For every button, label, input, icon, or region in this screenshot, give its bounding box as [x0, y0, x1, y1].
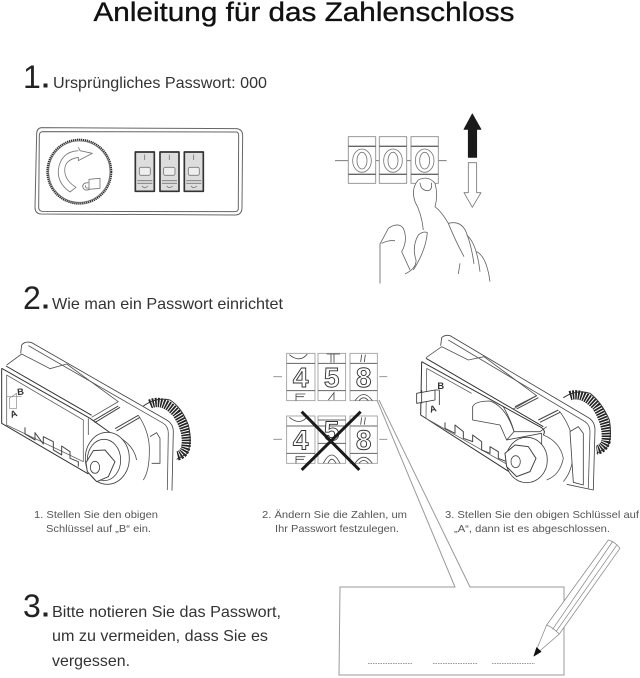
key slider at A — [417, 390, 439, 405]
crossed out 458 wheels: 8 — [356, 425, 371, 456]
wheels showing 000 — [348, 137, 438, 183]
housing top face — [7, 354, 118, 417]
illustration: finger turning wheels — [335, 114, 490, 283]
hand — [380, 178, 490, 283]
knurled knob — [143, 399, 190, 459]
key symbol — [83, 178, 100, 190]
step 3 text: vergessen. — [52, 653, 130, 670]
heading: step 1: Ursprüngliches Passwort: 000 — [53, 75, 267, 92]
correct 458 wheels: 8 — [356, 362, 371, 393]
caption 1: Schlüssel auf „B“ ein. — [46, 523, 151, 535]
crossed out 458 wheels — [273, 412, 387, 470]
icon: pencil — [534, 540, 620, 656]
letters B and A: B — [17, 387, 25, 397]
heading: step 1 — [23, 59, 267, 95]
illustration: digit wheels correct 458 and crossed out — [273, 353, 387, 470]
rotation arrow — [58, 147, 92, 192]
step 3 text: um zu vermeiden, dass Sie es — [52, 628, 268, 645]
key cylinder — [505, 437, 547, 483]
heading: step 1: 1 — [23, 59, 41, 95]
heading: step 2: Wie man ein Passwort einrichtet — [52, 296, 284, 313]
heading: step 2: 2 — [23, 280, 41, 316]
crossed out 458 wheels: 4 — [293, 425, 309, 456]
heading: step 2 — [23, 280, 284, 316]
crossed out 458 wheels: 5 — [324, 416, 339, 447]
number wheels — [135, 152, 203, 191]
indicator line — [335, 159, 447, 162]
housing frame — [2, 366, 113, 474]
lock plate — [35, 128, 243, 215]
key cylinder — [85, 432, 129, 484]
dial — [47, 140, 111, 204]
correct 458 wheels — [273, 353, 387, 401]
illustration: lock back, key on B — [2, 342, 190, 491]
housing frame — [421, 358, 544, 473]
step 3 text — [23, 588, 285, 670]
step 3 text: Bitte notieren Sie das Passwort, — [52, 604, 281, 621]
caption 1: 1. Stellen Sie den obigen — [34, 509, 158, 521]
caption 3: 3. Stellen Sie den obigen Schlüssel auf — [445, 509, 639, 521]
illustration: lock back, key on A — [417, 335, 611, 490]
black up arrow — [464, 114, 481, 157]
mounting plate — [2, 342, 173, 491]
letters B and A: B — [437, 381, 444, 391]
illustration: lock back, key on B: A — [9, 408, 19, 420]
white down arrow — [464, 163, 481, 207]
mounting plate — [421, 335, 595, 490]
X mark — [302, 412, 361, 470]
illustration: front view of combination lock — [35, 128, 243, 215]
knurled knob — [563, 392, 611, 453]
illustration: lock back, key on A: A — [428, 403, 438, 415]
housing top face — [426, 347, 537, 409]
tab notches — [445, 422, 507, 462]
key lever — [473, 401, 514, 440]
correct 458 wheels: 4 — [293, 362, 309, 393]
password dotted lines — [368, 662, 535, 664]
tab notches — [25, 427, 78, 467]
caption 2: Ihr Passwort festzulegen. — [275, 523, 399, 535]
caption 3: „A“, dann ist es abgeschlossen. — [454, 523, 610, 535]
note callout box with pointer — [339, 400, 564, 675]
step 3 text: 3 — [23, 588, 41, 624]
caption 2: 2. Ändern Sie die Zahlen, um — [262, 509, 407, 521]
correct 458 wheels: 5 — [324, 362, 339, 393]
